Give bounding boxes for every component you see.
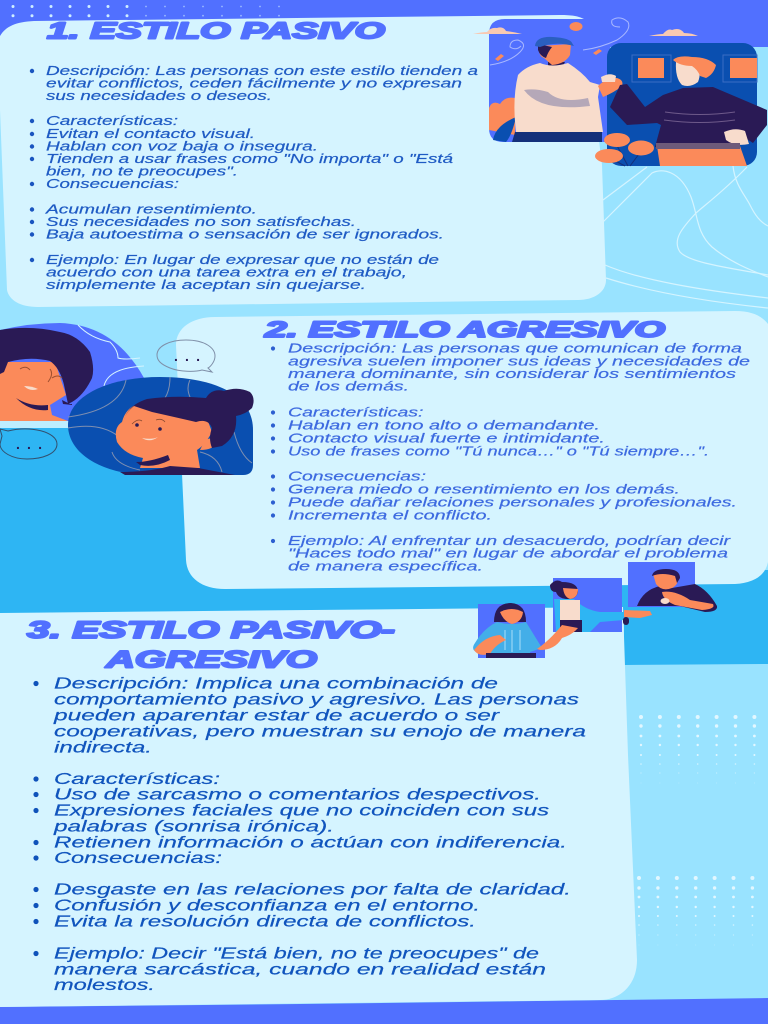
text block panel 1 [45, 63, 478, 292]
text block panel 2: Descripción: Las personas que comunican de forma [288, 340, 742, 356]
text block panel 1: Hablan con voz baja o insegura. [46, 138, 318, 154]
mid blue band [0, 428, 768, 665]
left face [0, 328, 93, 421]
man right [610, 56, 767, 166]
text block panel 3: Expresiones faciales que no coinciden con sus [54, 802, 549, 820]
title 3 [27, 617, 395, 674]
bullets panel 2 [271, 346, 275, 543]
speech bubble top: ... [174, 348, 200, 364]
orange plant right [595, 133, 654, 166]
text block panel 1: Características: [46, 113, 179, 128]
text block panel 2: Hablan en tono alto o demandante. [288, 418, 600, 432]
text block panel 3: Características: [54, 771, 220, 788]
text block panel 1: Evitan el contacto visual. [46, 126, 255, 141]
speech bubble bottom [0, 429, 57, 459]
text block panel 2: Incrementa el conflicto. [288, 508, 492, 522]
top blue band [0, 0, 768, 50]
panel 2 background [176, 311, 768, 589]
text block panel 3: Desgaste en las relaciones por falta de claridad. [54, 882, 571, 898]
text block panel 1: Baja autoestima o sensación de ser ignorados. [46, 226, 444, 242]
illustration: handshake [473, 18, 767, 166]
plant left [489, 98, 515, 135]
text block panel 1: sus necesidades o deseos. [46, 88, 272, 103]
text block panel 3: Confusión y desconfianza en el entorno. [54, 898, 480, 914]
text block panel 3: Retienen información o actúan con indiferencia. [54, 834, 567, 852]
illustration: two faces with speech bubbles [0, 323, 254, 475]
panel: estilo agresivo [176, 311, 768, 589]
text block panel 3: indirecta. [54, 740, 152, 756]
text block panel 2: Uso de frases como "Tú nunca…" o "Tú siempre…". [288, 444, 709, 458]
illustration: three people [473, 562, 717, 658]
text block panel 2: Genera miedo o resentimiento en los demás. [288, 482, 680, 496]
bottom blue band [0, 998, 768, 1024]
text block panel 2 [288, 340, 750, 574]
windows [632, 55, 757, 82]
bullets panel 1 [30, 69, 34, 262]
person top right [628, 562, 717, 612]
person middle [550, 578, 652, 632]
text block panel 3: Evita la resolución directa de conflictos. [54, 914, 476, 930]
text block panel 2: agresiva suelen imponer sus ideas y necesidades de [288, 354, 750, 368]
text block panel 3 [52, 676, 586, 994]
squiggles [490, 18, 629, 65]
text block panel 1: Sus necesidades no son satisfechas. [46, 214, 356, 229]
title 2: 2. ESTILO AGRESIVO [263, 317, 665, 342]
text block panel 2: manera dominante, sin considerar los sentimientos [288, 366, 737, 381]
text block panel 2: Ejemplo: Al enfrentar un desacuerdo, podrían decir [288, 533, 731, 548]
text block panel 1: bien, no te preocupes". [46, 164, 238, 178]
text block panel 3: manera sarcástica, cuando en realidad están [54, 962, 546, 978]
panel: estilo pasivo-agresivo [0, 607, 637, 1007]
text block panel 1: acuerdo con una tarea extra en el trabajo, [46, 264, 407, 280]
white curved lines [603, 166, 768, 308]
text block panel 1: Tienden a usar frases como "No importa" o "Está [46, 151, 453, 166]
text block panel 2: de los demás. [288, 378, 409, 394]
person left [473, 603, 578, 658]
text block panel 3: cooperativas, pero muestran su enojo de manera [54, 724, 586, 740]
text block panel 3: Ejemplo: Decir "Está bien, no te preocupes" de [54, 946, 539, 962]
circle squiggles [78, 325, 144, 386]
text block panel 3: Descripción: Implica una combinación de [54, 676, 498, 692]
man left [512, 37, 622, 142]
text block panel 1: Consecuencias: [46, 176, 180, 191]
right head [116, 389, 254, 475]
panel 3 background [0, 607, 637, 1007]
text block panel 3: Consecuencias: [54, 850, 222, 867]
text block panel 2: Consecuencias: [288, 468, 427, 484]
text block panel 3: molestos. [54, 977, 155, 994]
text block panel 3: palabras (sonrisa irónica). [52, 818, 334, 836]
text block panel 1: Descripción: Las personas con este estilo tienden a [46, 63, 478, 78]
speech bubble top [157, 340, 215, 372]
decorative dots at top [13, 6, 280, 16]
text block panel 1: evitar conflictos, ceden fácilmente y no expresan [46, 76, 462, 90]
dot grid upper right [641, 717, 760, 783]
blob squiggles [68, 377, 252, 472]
orange circle and marks [495, 22, 602, 61]
text block panel 2: de manera específica. [288, 558, 483, 574]
text block panel 2: "Haces todo mal" en lugar de abordar el problema [288, 546, 728, 560]
panel 1 background [0, 15, 606, 307]
right scene panel [607, 43, 757, 166]
bullets panel 3 [33, 681, 39, 956]
title 3: 3. ESTILO PASIVO- [27, 617, 395, 644]
right blob [68, 377, 253, 475]
text block panel 2: Características: [288, 404, 424, 420]
pale strip under left face [0, 421, 72, 428]
text block panel 2: Contacto visual fuerte e intimidante. [288, 430, 605, 446]
left scene panel [489, 19, 610, 142]
text block panel 3: pueden aparentar estar de acuerdo o ser [52, 708, 500, 724]
title 1: 1. ESTILO PASIVO [47, 18, 385, 44]
speech bubble bottom: ... [16, 436, 42, 452]
left circle [0, 323, 144, 421]
text block panel 2: Puede dañar relaciones personales y profesionales. [288, 494, 737, 510]
panel: estilo pasivo [0, 15, 606, 307]
text block panel 1: Acumulan resentimiento. [45, 202, 257, 216]
text block panel 1: simplemente la aceptan sin quejarse. [46, 277, 366, 292]
clouds [473, 27, 698, 36]
dot grid lower right [639, 878, 758, 945]
text block panel 3: comportamiento pasivo y agresivo. Las personas [54, 692, 579, 708]
text block panel 3: Uso de sarcasmo o comentarios despectivos. [54, 786, 541, 804]
text block panel 1: Ejemplo: En lugar de expresar que no están de [46, 252, 439, 267]
title 3: AGRESIVO [104, 646, 317, 674]
